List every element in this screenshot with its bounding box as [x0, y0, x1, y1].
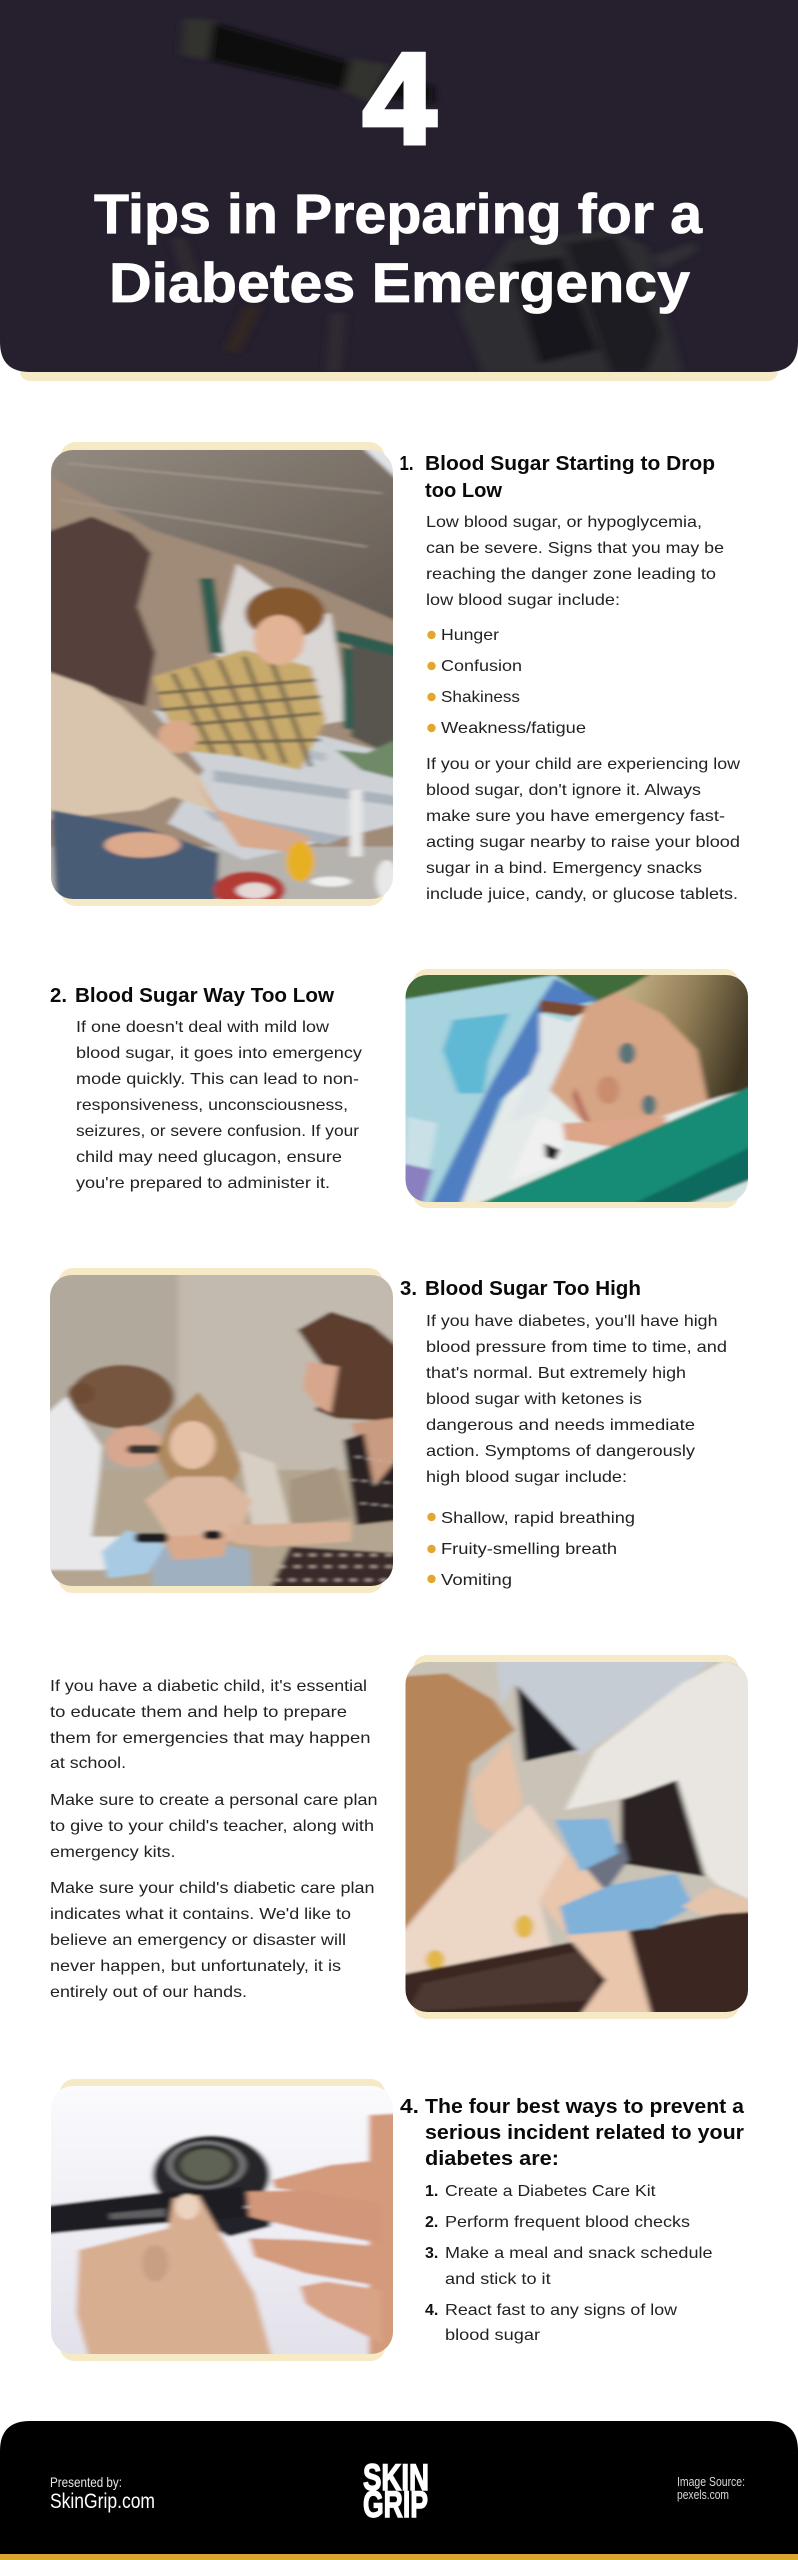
logo: SkinGrip: SKIN: [363, 2457, 429, 2498]
title: [94, 182, 703, 314]
panel: footer: [0, 2421, 798, 2560]
text block: school preparation: believe an emergency or disaster will: [50, 1932, 346, 1949]
text block: tip 1 intro: low blood sugar include:: [426, 592, 620, 609]
numbered list: prevention steps: 1.: [425, 2183, 438, 2200]
panel: header: [0, 0, 798, 381]
numbered list: prevention steps: 2.: [425, 2214, 438, 2231]
heading: tip 1: [400, 453, 715, 502]
heading: tip 4: The four best ways to prevent a: [425, 2096, 745, 2118]
bullet list: low blood sugar signs: Weakness/fatigue: [441, 720, 586, 737]
text block: tip 3 body: dangerous and needs immediate: [426, 1417, 695, 1434]
text block: school preparation: emergency kits.: [50, 1844, 176, 1861]
text block: tip 1 advice: make sure you have emergency fast-: [426, 808, 725, 825]
title: Tips in Preparing for a: [94, 182, 703, 245]
header background photo: [0, 0, 798, 372]
numbered list: prevention steps: blood sugar: [445, 2327, 541, 2344]
footer accent strip: [0, 2554, 798, 2560]
heading: tip 3: 3.: [400, 1278, 417, 1300]
title: Diabetes Emergency: [109, 251, 690, 314]
presented by: [50, 2474, 155, 2513]
panel: tip 4 photo: [46, 2079, 402, 2361]
text block: tip 2 body: child may need glucagon, ensure: [76, 1149, 342, 1166]
text block: tip 1 advice: include juice, candy, or glucose tablets.: [426, 886, 738, 903]
panel: tip 1 text: [400, 453, 740, 903]
presented by: SkinGrip.com: [50, 2490, 155, 2513]
text block: tip 2 body: mode quickly. This can lead to non-: [76, 1071, 359, 1088]
text block: tip 3 body: If you have diabetes, you'll have high: [426, 1313, 718, 1330]
text block: school preparation: Make sure to create a personal care plan: [50, 1792, 378, 1809]
text block: tip 2 body: seizures, or severe confusion. If your: [76, 1123, 360, 1140]
heading: tip 2: 2.: [50, 985, 67, 1007]
text block: tip 1 advice: [426, 756, 740, 903]
presented by: Presented by:: [50, 2474, 122, 2490]
text block: school preparation: indicates what it contains. We'd like to: [50, 1906, 351, 1923]
text block: tip 3 body: blood sugar with ketones is: [426, 1391, 642, 1408]
text block: school preparation: at school.: [50, 1755, 126, 1772]
text block: tip 1 advice: sugar in a bind. Emergency snacks: [426, 860, 702, 877]
text block: tip 3 body: [426, 1313, 727, 1486]
text block: tip 2 body: you're prepared to administer it.: [76, 1175, 330, 1192]
text block: tip 1 advice: acting sugar nearby to raise your blood: [426, 834, 740, 851]
big number 4: 4: [363, 27, 436, 171]
panel: tip 1 photo: [43, 442, 402, 908]
text block: tip 1 advice: blood sugar, don't ignore it. Always: [426, 782, 701, 799]
text block: tip 3 body: that's normal. But extremely high: [426, 1365, 686, 1382]
heading: tip 3: Blood Sugar Too High: [425, 1278, 641, 1300]
heading: tip 4: diabetes are:: [425, 2148, 559, 2170]
text block: school preparation: them for emergencies that may happen: [50, 1730, 370, 1747]
image source: pexels.com: [677, 2487, 729, 2502]
text block: school preparation: If you have a diabetic child, it's essential: [50, 1678, 367, 1695]
image source: [677, 2474, 745, 2502]
bullet list: low blood sugar signs: Shakiness: [441, 689, 520, 706]
numbered list: prevention steps: React fast to any signs of low: [445, 2302, 677, 2319]
bullet list: low blood sugar signs: Hunger: [441, 627, 500, 644]
image source: Image Source:: [677, 2474, 745, 2489]
text block: school preparation: [50, 1678, 378, 2001]
text block: tip 2 body: blood sugar, it goes into emergency: [76, 1045, 362, 1062]
bullet list: high blood sugar symptoms: [427, 1510, 635, 1589]
text block: tip 1 intro: can be severe. Signs that you may be: [426, 540, 724, 557]
numbered list: prevention steps: [425, 2183, 713, 2344]
heading: tip 2: Blood Sugar Way Too Low: [75, 985, 334, 1007]
text block: tip 3 body: blood pressure from time to time, and: [426, 1339, 727, 1356]
text block: tip 2 body: responsiveness, unconsciousness,: [76, 1097, 348, 1114]
heading: tip 4: 4.: [400, 2096, 419, 2118]
panel: tip 2 photo: [400, 969, 758, 1208]
hand: right-hand fingers: [247, 2113, 402, 2358]
text block: tip 3 body: high blood sugar include:: [426, 1469, 627, 1486]
numbered list: prevention steps: and stick to it: [445, 2271, 551, 2288]
text block: tip 2 body: [76, 1019, 362, 1192]
logo: SkinGrip: [363, 2457, 429, 2525]
numbered list: prevention steps: 4.: [425, 2302, 438, 2319]
heading: tip 1: Blood Sugar Starting to Drop: [425, 453, 715, 475]
heading: tip 4: serious incident related to your: [425, 2122, 744, 2144]
heading: tip 1: 1.: [400, 453, 414, 475]
text block: school preparation: to give to your child's teacher, along with: [50, 1818, 374, 1835]
numbered list: prevention steps: Perform frequent blood checks: [445, 2214, 690, 2231]
bullet list: high blood sugar symptoms: Vomiting: [441, 1572, 512, 1589]
panel: tip 2 text: [50, 985, 362, 1192]
text block: tip 1 advice: If you or your child are experiencing low: [426, 756, 740, 773]
text block: tip 1 intro: [426, 514, 724, 609]
text block: school preparation: never happen, but unfortunately, it is: [50, 1958, 341, 1975]
numbered list: prevention steps: Create a Diabetes Care Kit: [445, 2183, 656, 2200]
text block: tip 1 intro: reaching the danger zone leading to: [426, 566, 716, 583]
panel: tip 3 photo: [43, 1268, 402, 1593]
text block: school preparation: to educate them and help to prepare: [50, 1704, 347, 1721]
logo: SkinGrip: GRIP: [363, 2484, 428, 2525]
bullet list: high blood sugar symptoms: Fruity-smelling breath: [441, 1541, 617, 1558]
numbered list: prevention steps: Make a meal and snack schedule: [445, 2245, 713, 2262]
panel: tip 4 text: [400, 2096, 745, 2344]
numbered list: prevention steps: 3.: [425, 2245, 438, 2262]
panel: tip 3 text: [400, 1278, 727, 1589]
text block: tip 1 intro: Low blood sugar, or hypoglycemia,: [426, 514, 702, 531]
text block: school preparation: Make sure your child's diabetic care plan: [50, 1880, 374, 1897]
text block: tip 2 body: If one doesn't deal with mild low: [76, 1019, 329, 1036]
bullet list: low blood sugar signs: [427, 627, 586, 737]
heading: tip 4: [400, 2096, 745, 2170]
text block: tip 3 body: action. Symptoms of dangerously: [426, 1443, 695, 1460]
bullet list: high blood sugar symptoms: Shallow, rapid breathing: [441, 1510, 635, 1527]
header accent strip: [20, 350, 778, 381]
panel: school photo: [400, 1655, 758, 2019]
bullet list: low blood sugar signs: Confusion: [441, 658, 522, 675]
text block: school preparation: entirely out of our hands.: [50, 1984, 247, 2001]
heading: tip 1: too Low: [425, 480, 502, 502]
